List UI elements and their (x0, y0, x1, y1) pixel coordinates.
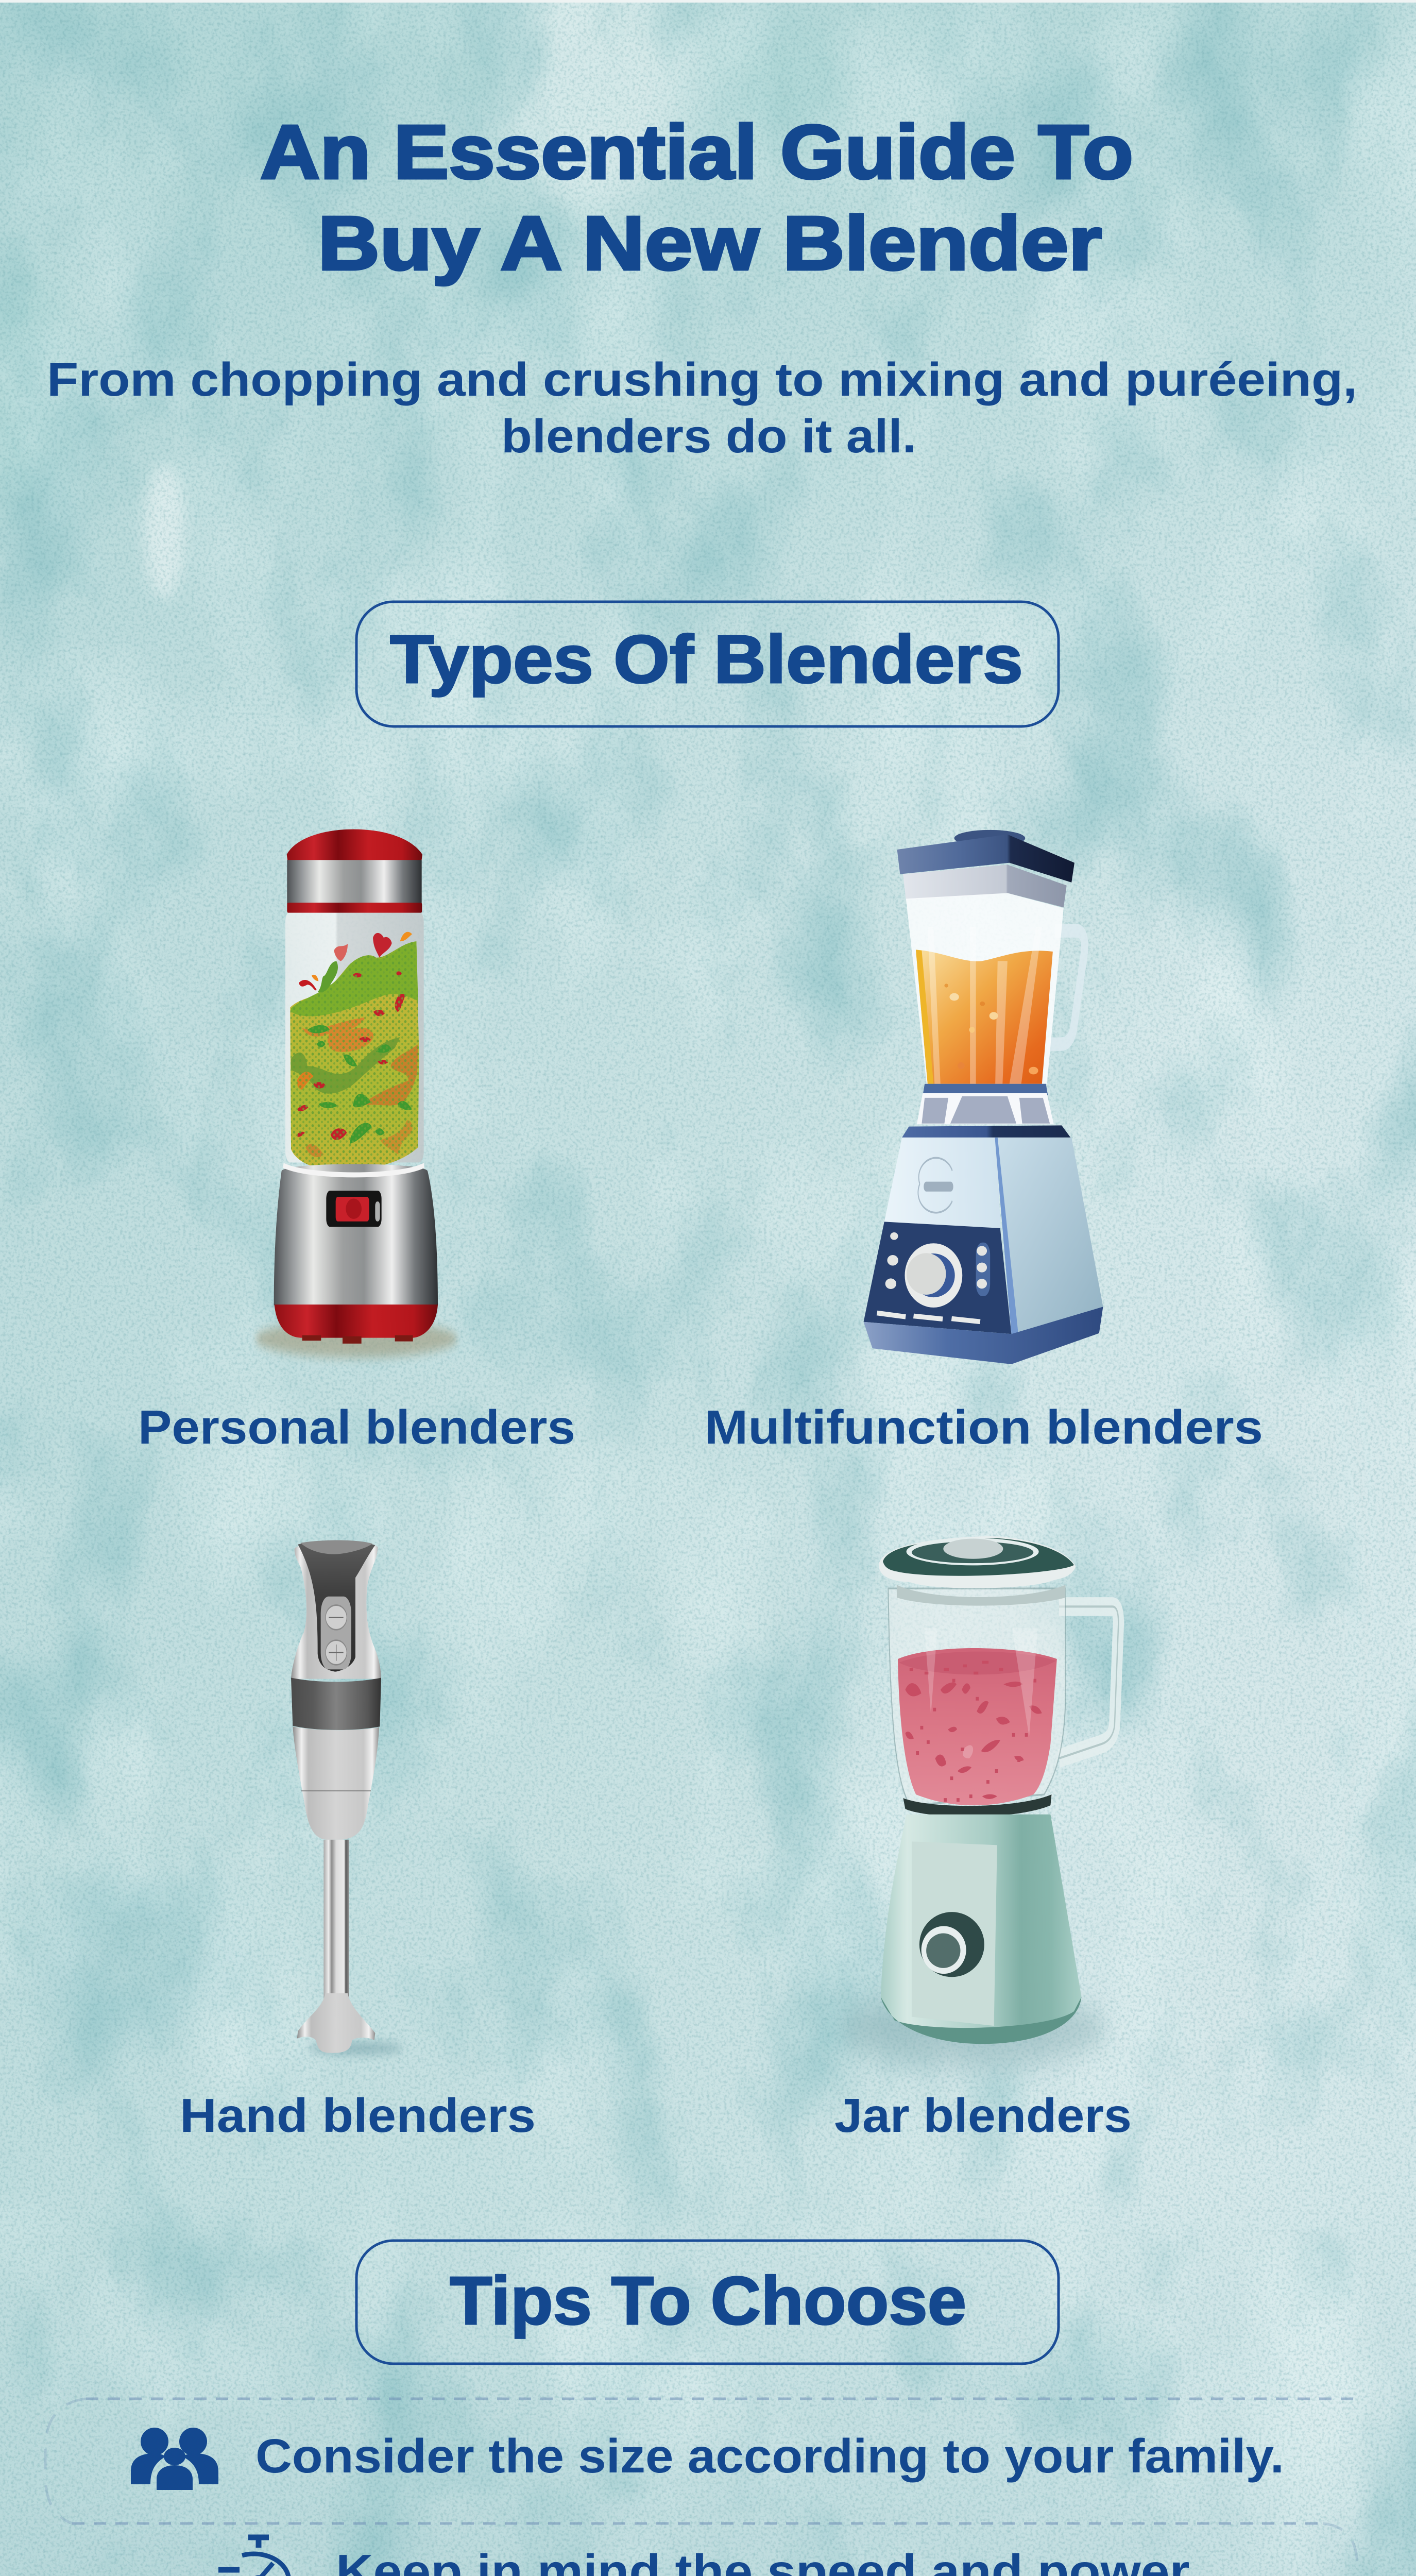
subtitle: blenders do it all. (501, 410, 916, 463)
title (260, 110, 1133, 286)
label: hand blenders: Hand blenders (180, 2089, 536, 2142)
subtitle: From chopping and crushing to mixing and puréeing, (47, 353, 1357, 406)
title: Buy A New Blender (318, 201, 1102, 286)
icon: stopwatch (218, 2537, 289, 2576)
tip 1: Consider the size according to your family. (255, 2429, 1284, 2483)
icon: family group (131, 2428, 218, 2490)
heading: tips to choose: Tips To Choose (450, 2263, 966, 2338)
hand blender illustration (291, 1540, 403, 2054)
label: jar blenders: Jar blenders (834, 2089, 1132, 2142)
dashed tip row frames (45, 2399, 1381, 2576)
tip 2 (218, 2537, 1201, 2576)
label: multifunction blenders: Multifunction blenders (705, 1400, 1263, 1454)
multifunction blender illustration (864, 830, 1103, 1364)
heading: types of blenders (356, 602, 1059, 726)
subtitle (47, 353, 1357, 463)
jar blender illustration (841, 1536, 1118, 2065)
heading: types of blenders: Types Of Blenders (390, 621, 1023, 697)
title: An Essential Guide To (260, 110, 1133, 195)
personal blender illustration (255, 829, 457, 1358)
heading: tips to choose (356, 2241, 1059, 2364)
label: personal blenders: Personal blenders (138, 1400, 575, 1454)
